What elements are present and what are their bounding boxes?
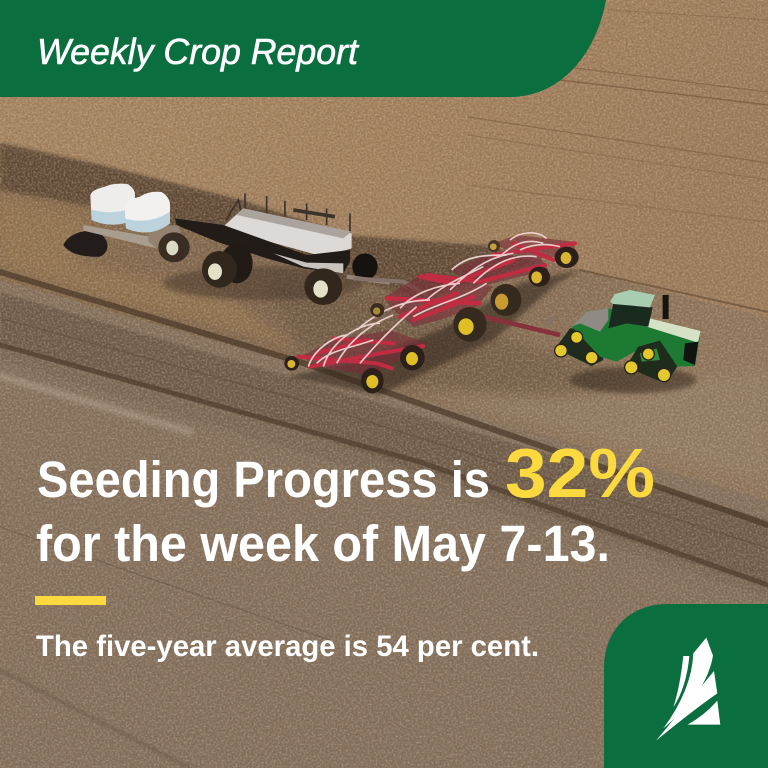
seeded middle field <box>0 143 768 500</box>
icon: drill wheel 7 <box>555 247 579 268</box>
grey road band <box>0 292 768 598</box>
icon: drill wheel 1 <box>284 356 299 371</box>
machine-side dark soil <box>270 285 660 395</box>
engine cover rear <box>572 308 608 332</box>
cab <box>608 303 653 328</box>
corner panel with logo <box>604 604 768 768</box>
icon: drill wheel 3 <box>400 345 425 370</box>
icon: drill wheel 5 <box>491 284 521 316</box>
icon: drill wheel 9 <box>370 303 384 317</box>
icon: rear track <box>63 231 108 257</box>
cart tank body <box>223 208 352 257</box>
cart chassis <box>175 218 350 273</box>
seeding drill <box>284 233 580 395</box>
pale right field <box>410 370 768 480</box>
tow hitch and bar <box>353 278 555 327</box>
tractor shadow <box>570 367 697 393</box>
headline second line: for the week of May 7-13. <box>36 515 610 572</box>
icon: rear cart wheel <box>352 253 378 280</box>
cart railing <box>226 193 350 233</box>
green tractor <box>555 290 701 393</box>
icon: drill wheel 4 <box>453 307 487 342</box>
icon: wheat logo <box>656 638 720 741</box>
icon: white tanks <box>90 184 170 232</box>
tank trailer frame <box>83 225 181 248</box>
icon: cart wheel right <box>304 268 342 305</box>
headline <box>37 434 655 512</box>
headline figure: 32% <box>505 434 655 512</box>
icon: cart wheel back <box>221 243 253 283</box>
rear tracks <box>555 328 603 366</box>
upper field <box>0 0 768 320</box>
icon: drill wheel 2 <box>361 368 384 393</box>
cab roof <box>610 290 655 307</box>
icon: drill wheel 8 <box>488 240 500 252</box>
hood <box>647 318 701 343</box>
golden stubble <box>0 200 300 350</box>
body <box>572 308 701 367</box>
drill shadow <box>287 270 580 395</box>
red drill frames <box>298 243 575 368</box>
white seed hoses <box>308 233 560 367</box>
dark soil band <box>0 143 540 300</box>
front tracks <box>626 341 677 383</box>
red drill mass <box>300 235 577 377</box>
icon: drill wheel 6 <box>529 267 550 287</box>
five-year average text: The five-year average is 54 per cent. <box>36 630 539 663</box>
hitch <box>347 277 390 283</box>
headline: Seeding Progress is <box>37 451 490 508</box>
exhaust <box>663 295 669 319</box>
header banner <box>0 0 606 97</box>
yellow rule <box>35 596 106 605</box>
icon: track rollers <box>555 331 671 382</box>
air cart with tanks <box>63 184 390 305</box>
icon: cart wheel left <box>202 251 237 288</box>
icon: trailer wheel <box>158 232 190 262</box>
shadow <box>163 267 363 300</box>
title: Weekly Crop Report <box>37 31 360 72</box>
